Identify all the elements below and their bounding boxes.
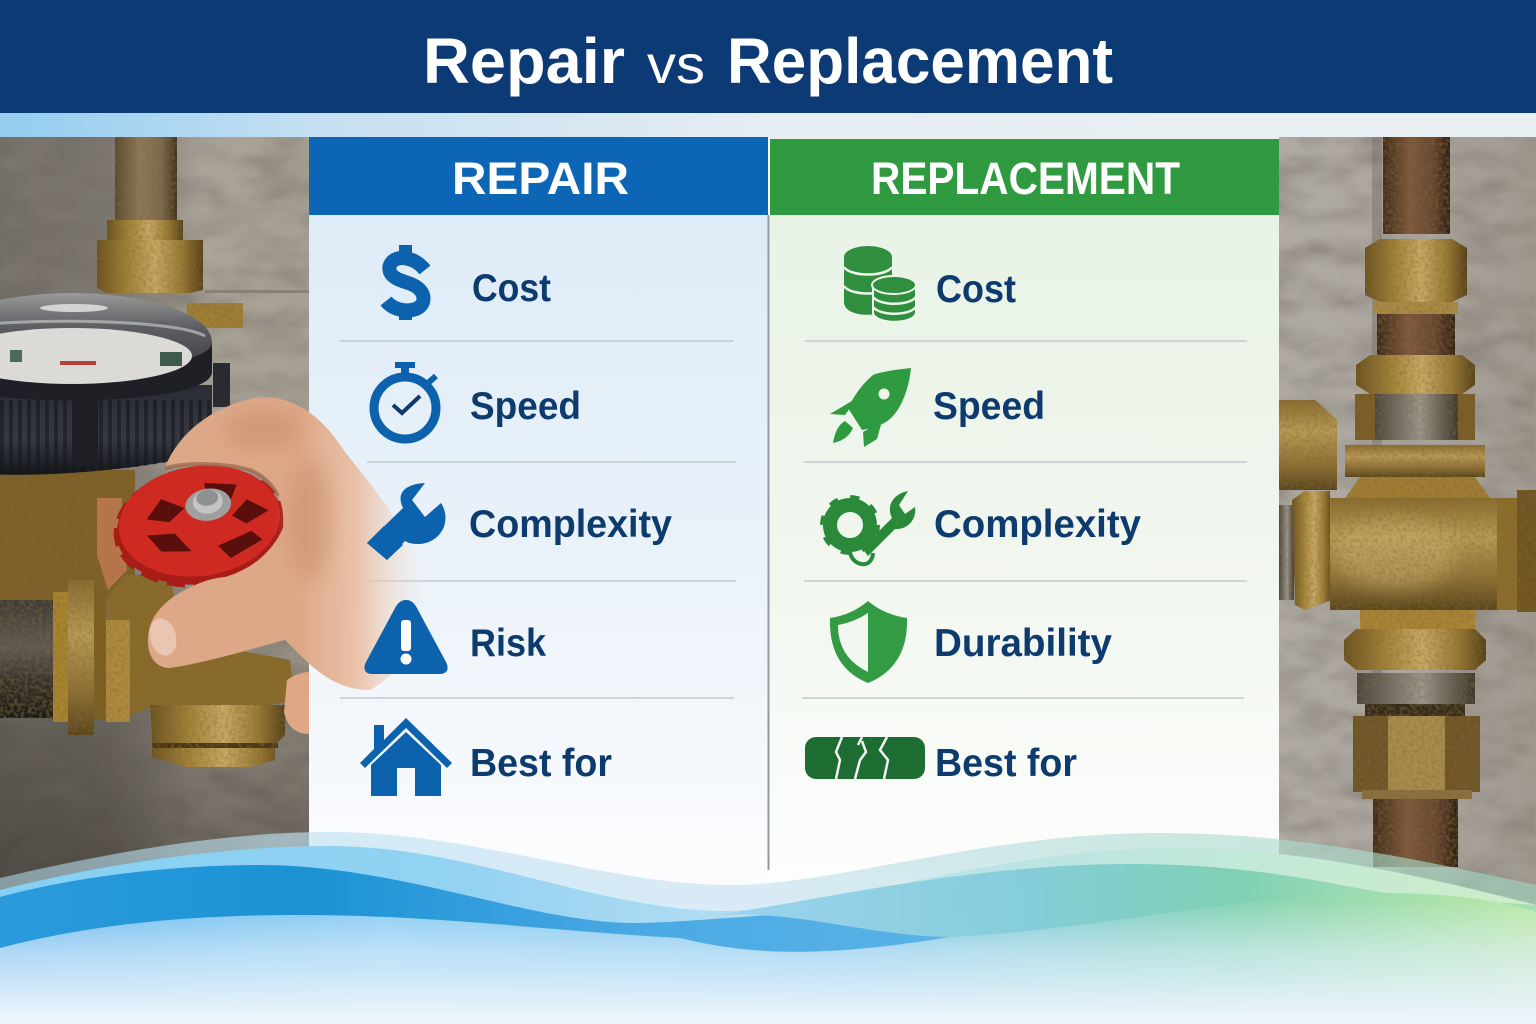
label: durability: Durability	[934, 622, 1112, 665]
icon: cracked pipe wrap	[805, 737, 925, 779]
title bar: Replacement	[727, 25, 1113, 97]
label: complexity: Complexity	[469, 503, 672, 546]
icon: dollar sign	[386, 245, 425, 320]
water waves	[0, 832, 1536, 1024]
title bar	[0, 0, 1536, 113]
icon: house	[360, 718, 452, 796]
icon: warning triangle	[364, 600, 448, 674]
label: best for: Best for	[470, 742, 612, 785]
label: cost: Cost	[472, 267, 551, 310]
replacement header: REPLACEMENT	[871, 153, 1180, 204]
label: cost: Cost	[936, 268, 1016, 311]
photo: right concrete wall and brass pipe fitting	[1260, 137, 1536, 907]
label: risk: Risk	[470, 622, 546, 665]
icon: stopwatch	[374, 362, 436, 439]
icon: shield	[830, 601, 907, 683]
title bar: vs	[647, 35, 705, 95]
repair rows	[360, 245, 672, 796]
icon: coin stacks	[844, 246, 916, 322]
repair header: REPAIR	[452, 153, 629, 204]
water meter	[0, 293, 230, 475]
red valve wheel	[109, 455, 291, 595]
panel: repair	[309, 137, 768, 898]
label: speed: Speed	[933, 385, 1045, 428]
icon: rocket	[830, 368, 911, 447]
repair header	[309, 137, 768, 215]
title: Repair	[423, 25, 625, 97]
panel: replacement	[770, 137, 1279, 898]
copper lug	[97, 498, 127, 590]
replacement header	[770, 139, 1279, 215]
replacement rows	[805, 246, 1141, 785]
label: complexity: Complexity	[934, 503, 1141, 546]
icon: gear and wrench	[823, 491, 915, 564]
icon: wrench	[367, 483, 445, 560]
photo: hand turning the valve	[146, 397, 425, 734]
photo: left concrete wall and water meter with valve	[0, 137, 330, 907]
label: speed: Speed	[470, 385, 581, 428]
label: best for: Best for	[935, 742, 1077, 785]
